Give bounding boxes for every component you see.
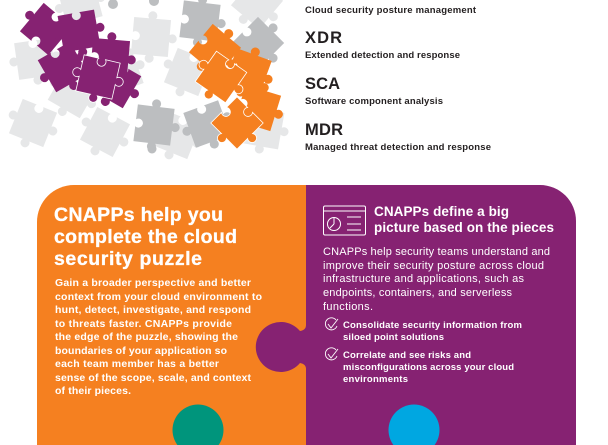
body text: purple panel: improve their security posture across cloud bbox=[323, 260, 544, 272]
XDR description: Extended detection and response bbox=[305, 50, 460, 61]
body text: purple panel: CNAPPs help security teams understand and bbox=[323, 246, 550, 258]
body text: purple panel: endpoints, containers, and serverless bbox=[323, 287, 512, 299]
icon: check mark 1 bbox=[325, 318, 338, 330]
heading: help complete the puzzle bbox=[54, 204, 237, 270]
heading: define a big picture: CNAPPs define a big bbox=[374, 204, 509, 219]
SCA acronym: SCA bbox=[305, 75, 340, 93]
puzzle pieces illustration bbox=[0, 0, 295, 169]
light grey puzzle pieces bbox=[0, 0, 292, 169]
body text: orange panel: boundaries of your application so bbox=[55, 345, 227, 357]
body text: purple panel: infrastructure and applications, such as bbox=[323, 273, 524, 285]
body text: orange panel: hunt, detect, investigate, and respond bbox=[55, 304, 251, 316]
SCA description: Software component analysis bbox=[305, 96, 443, 107]
body text: orange panel: context from your cloud environment to bbox=[55, 291, 262, 303]
body text: orange panel: the edge of the puzzle, showing the bbox=[55, 331, 238, 343]
body text: orange panel: sense of the scope, scale, and context bbox=[55, 372, 252, 384]
orange background bbox=[37, 185, 306, 445]
orange puzzle pieces bbox=[184, 18, 290, 160]
bullet text 2: environments bbox=[343, 374, 408, 385]
body text: orange panel: Gain a broader perspective and better bbox=[55, 277, 251, 289]
body text: purple panel: functions. bbox=[323, 301, 373, 313]
body text: orange panel: to threats faster. CNAPPs provide bbox=[55, 318, 232, 330]
MDR description: Managed threat detection and response bbox=[305, 142, 491, 153]
acronym list bbox=[305, 5, 491, 153]
purple background with puzzle tab bbox=[256, 185, 576, 445]
bullet text 2 bbox=[343, 350, 514, 385]
MDR acronym: MDR bbox=[305, 121, 343, 139]
purple puzzle pieces bbox=[14, 0, 148, 118]
blue puzzle knob bbox=[388, 404, 440, 445]
panel: purple right bbox=[256, 185, 576, 445]
body text: purple panel bbox=[323, 246, 550, 313]
teal puzzle knob bbox=[172, 404, 224, 445]
icon: dashboard window bbox=[324, 206, 366, 235]
heading: define a big picture bbox=[374, 204, 554, 235]
heading: help complete the puzzle: CNAPPs help you bbox=[54, 204, 223, 226]
body text: orange panel: of their pieces. bbox=[55, 385, 131, 397]
bullet text 2: Correlate and see risks and bbox=[343, 350, 471, 361]
icon: check mark 2 bbox=[325, 348, 338, 360]
heading: define a big picture: picture based on the pieces bbox=[374, 220, 554, 235]
bullet text 1: Consolidate security information from bbox=[343, 320, 522, 331]
panel: orange left bbox=[37, 185, 306, 445]
heading: help complete the puzzle: security puzzle bbox=[54, 248, 202, 270]
bullet text 1 bbox=[343, 320, 522, 343]
XDR acronym: XDR bbox=[305, 29, 342, 47]
body text: orange panel: each team member has a better bbox=[55, 358, 219, 370]
heading: help complete the puzzle: complete the cloud bbox=[54, 226, 237, 248]
CSPM description: Cloud security posture management bbox=[305, 5, 477, 16]
bullet text 1: siloed point solutions bbox=[343, 332, 444, 343]
dark grey puzzle pieces bbox=[108, 0, 295, 157]
body text: orange panel bbox=[55, 277, 262, 397]
bullet text 2: misconfigurations across your cloud bbox=[343, 362, 514, 373]
